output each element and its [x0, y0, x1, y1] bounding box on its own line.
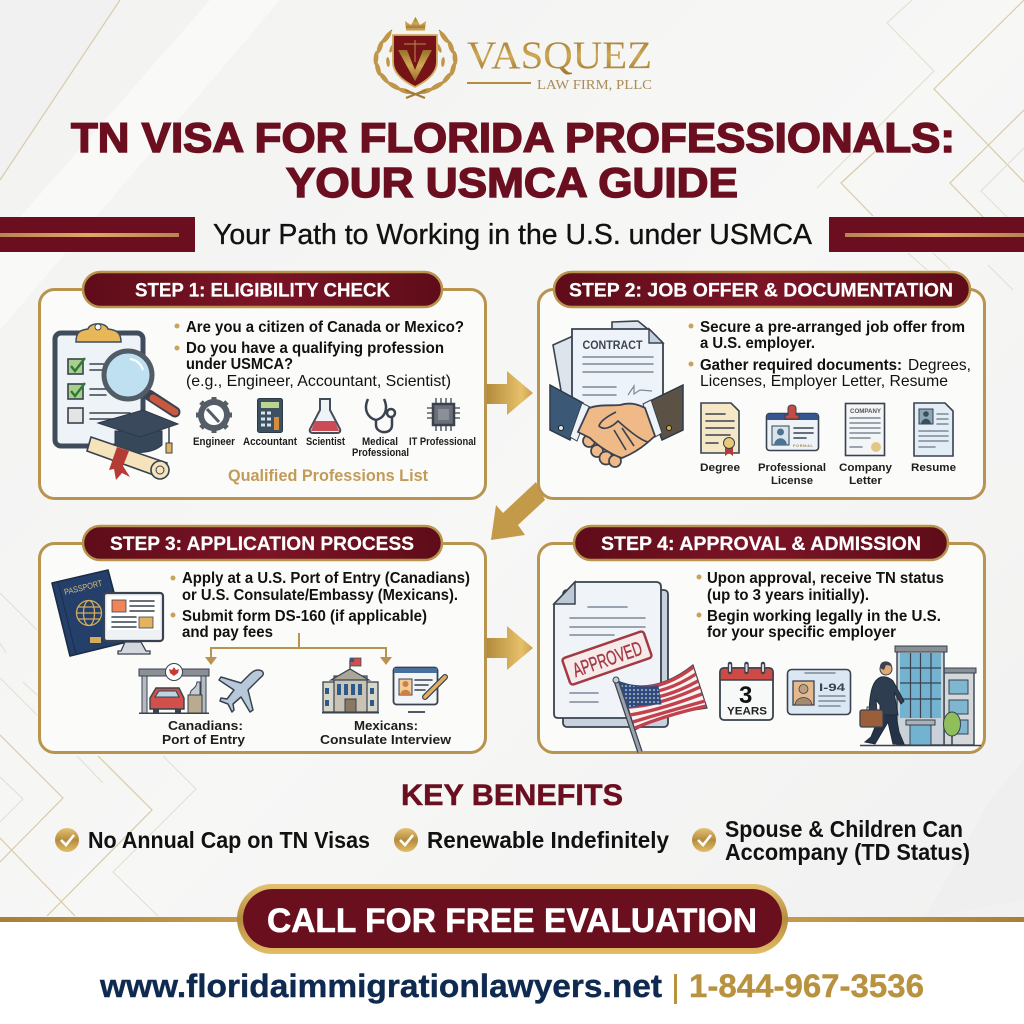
icon: company letter [846, 404, 884, 456]
benefit: renewable indefinitely: Renewable Indefinitely [427, 827, 669, 853]
title: TN VISA FOR FLORIDA PROFESSIONALS: [71, 114, 955, 161]
step 1 bullets [174, 319, 464, 390]
icon: consulate building [322, 658, 379, 714]
subtitle banner: Your Path to Working in the U.S. under USMCA [213, 219, 813, 251]
icon: degree [701, 403, 739, 456]
step 4 bullets [696, 570, 944, 641]
route labels [162, 718, 452, 747]
title [71, 114, 955, 206]
icon: port of entry [139, 664, 209, 714]
icon: resume [914, 403, 953, 456]
subtitle banner [0, 217, 1024, 252]
step 2 bullets: Secure a pre-arranged job offer from [700, 319, 965, 336]
qualified professions list label: Qualified Professions List [228, 466, 428, 485]
approved stamp [562, 631, 652, 685]
contact line [99, 968, 924, 1004]
logo subtitle: LAW FIRM, PLLC [537, 78, 652, 93]
icon: professional license [766, 405, 818, 450]
step 4 bullets: (up to 3 years initially). [707, 587, 869, 604]
panel: step 4 approval and admission [538, 526, 984, 752]
panel: step 3 application process [40, 526, 486, 752]
icon: IT chip [427, 398, 460, 431]
benefit: spouse and children [692, 816, 970, 865]
document labels: Letter [849, 475, 883, 487]
step 2 bullets: a U.S. employer. [700, 335, 815, 352]
document labels: Degree [700, 462, 740, 474]
route labels: Mexicans: [354, 718, 418, 733]
key benefits heading: KEY BENEFITS [401, 779, 623, 812]
step 1 bullets: (e.g., Engineer, Accountant, Scientist) [186, 373, 451, 390]
step 3 bullets: or U.S. Consulate/Embassy (Mexicans). [182, 587, 458, 604]
gold divider [0, 917, 1024, 922]
panel: step 2 job offer and documentation [538, 272, 984, 498]
step 1 bullets: Do you have a qualifying profession [186, 340, 444, 357]
benefit: no annual cap: No Annual Cap on TN Visas [88, 827, 370, 853]
icon: airplane [219, 670, 263, 712]
step 3 bullets: and pay fees [182, 624, 273, 641]
step 3 bullets: Submit form DS-160 (if applicable) [182, 608, 427, 625]
step 3 bullets: Apply at a U.S. Port of Entry (Canadians) [182, 570, 470, 587]
icon: 3 years calendar: YEARS [727, 706, 767, 718]
call to action button: CALL FOR FREE EVALUATION [267, 902, 757, 940]
icon: I-94 card: I-94 [819, 682, 846, 694]
step 4 bullets: Begin working legally in the U.S. [707, 608, 941, 625]
icon: approved document [554, 582, 668, 727]
icon: clipboard with magnifier, cap and diploma [55, 324, 178, 480]
benefit: spouse and children: Spouse & Children Can [725, 816, 963, 842]
icon: passport and computer [52, 570, 163, 656]
step 3 heading [83, 526, 442, 560]
icon: medical stethoscope [366, 399, 395, 432]
step 2 heading [554, 272, 970, 307]
contact line: 1-844-967-3536 [689, 968, 924, 1004]
document labels: Resume [911, 462, 956, 474]
step 2 heading: STEP 2: JOB OFFER & DOCUMENTATION [569, 280, 953, 302]
route labels: Port of Entry [162, 732, 246, 747]
icon: passport and computer: PASSPORT [63, 578, 103, 597]
profession labels: Scientist [306, 436, 345, 448]
benefit: spouse and children: Accompany (TD Status) [725, 839, 970, 865]
icon: I-94 card [788, 670, 850, 714]
icon: crown [405, 17, 426, 30]
document labels [700, 462, 956, 487]
icon: american flag [613, 665, 707, 752]
icon: contract and handshake [550, 321, 683, 467]
profession labels: Medical [362, 436, 398, 448]
icon: online application [394, 668, 445, 712]
wordmark: VASQUEZ [467, 34, 652, 77]
profession labels: IT Professional [409, 436, 476, 448]
step 2 bullets [688, 319, 971, 390]
icon: professional walking with briefcase [860, 661, 904, 744]
icon: professional license: FORMAL [793, 443, 814, 448]
arrow: step 2 to step 3 [491, 482, 545, 540]
icon: office building [860, 646, 981, 746]
profession labels: Accountant [243, 436, 297, 448]
route labels: Canadians: [168, 718, 243, 733]
route labels: Consulate Interview [320, 732, 452, 747]
step 2 bullets: Degrees, [908, 357, 971, 374]
icon: 3 years calendar: 3 [739, 682, 752, 709]
profession labels [193, 436, 476, 459]
panel: step 1 eligibility check [40, 272, 486, 498]
icon: company letter: COMPANY [850, 409, 881, 415]
step 1 heading [83, 272, 442, 307]
icon: accountant calculator [258, 398, 282, 432]
connector arrows [205, 633, 392, 665]
step 2 bullets: Gather required documents: [700, 357, 902, 374]
step 1 bullets: Are you a citizen of Canada or Mexico? [186, 319, 464, 336]
arrow: step 1 to step 2 [486, 371, 533, 415]
profession labels: Engineer [193, 436, 236, 448]
step 1 heading: STEP 1: ELIGIBILITY CHECK [135, 280, 390, 302]
profession labels: Professional [352, 447, 409, 459]
arrow: step 3 to step 4 [486, 626, 533, 670]
icon: scientist flask [310, 399, 340, 433]
icon: contract and handshake: CONTRACT [582, 340, 642, 352]
step 4 heading: STEP 4: APPROVAL & ADMISSION [601, 534, 921, 555]
step 4 bullets: for your specific employer [707, 624, 896, 641]
step 1 bullets: under USMCA? [186, 356, 293, 373]
icon: engineer gear [196, 397, 232, 433]
step 3 bullets [170, 570, 470, 641]
icon: shield [393, 35, 437, 87]
approved stamp: APPROVED [570, 638, 645, 682]
document labels: Company [839, 462, 893, 474]
title: YOUR USMCA GUIDE [286, 159, 738, 206]
icon: 3 years calendar [720, 664, 773, 720]
icon: laurel wreath [373, 30, 458, 98]
step 4 bullets: Upon approval, receive TN status [707, 570, 944, 587]
step 4 heading [574, 526, 948, 560]
document labels: License [771, 475, 813, 487]
step 3 heading: STEP 3: APPLICATION PROCESS [110, 534, 414, 555]
document labels: Professional [758, 462, 826, 474]
step 2 bullets: Licenses, Employer Letter, Resume [700, 373, 948, 390]
call to action button [237, 884, 788, 954]
logo: Vasquez Law Firm [373, 17, 652, 98]
contact line: www.floridaimmigrationlawyers.net [99, 968, 662, 1004]
